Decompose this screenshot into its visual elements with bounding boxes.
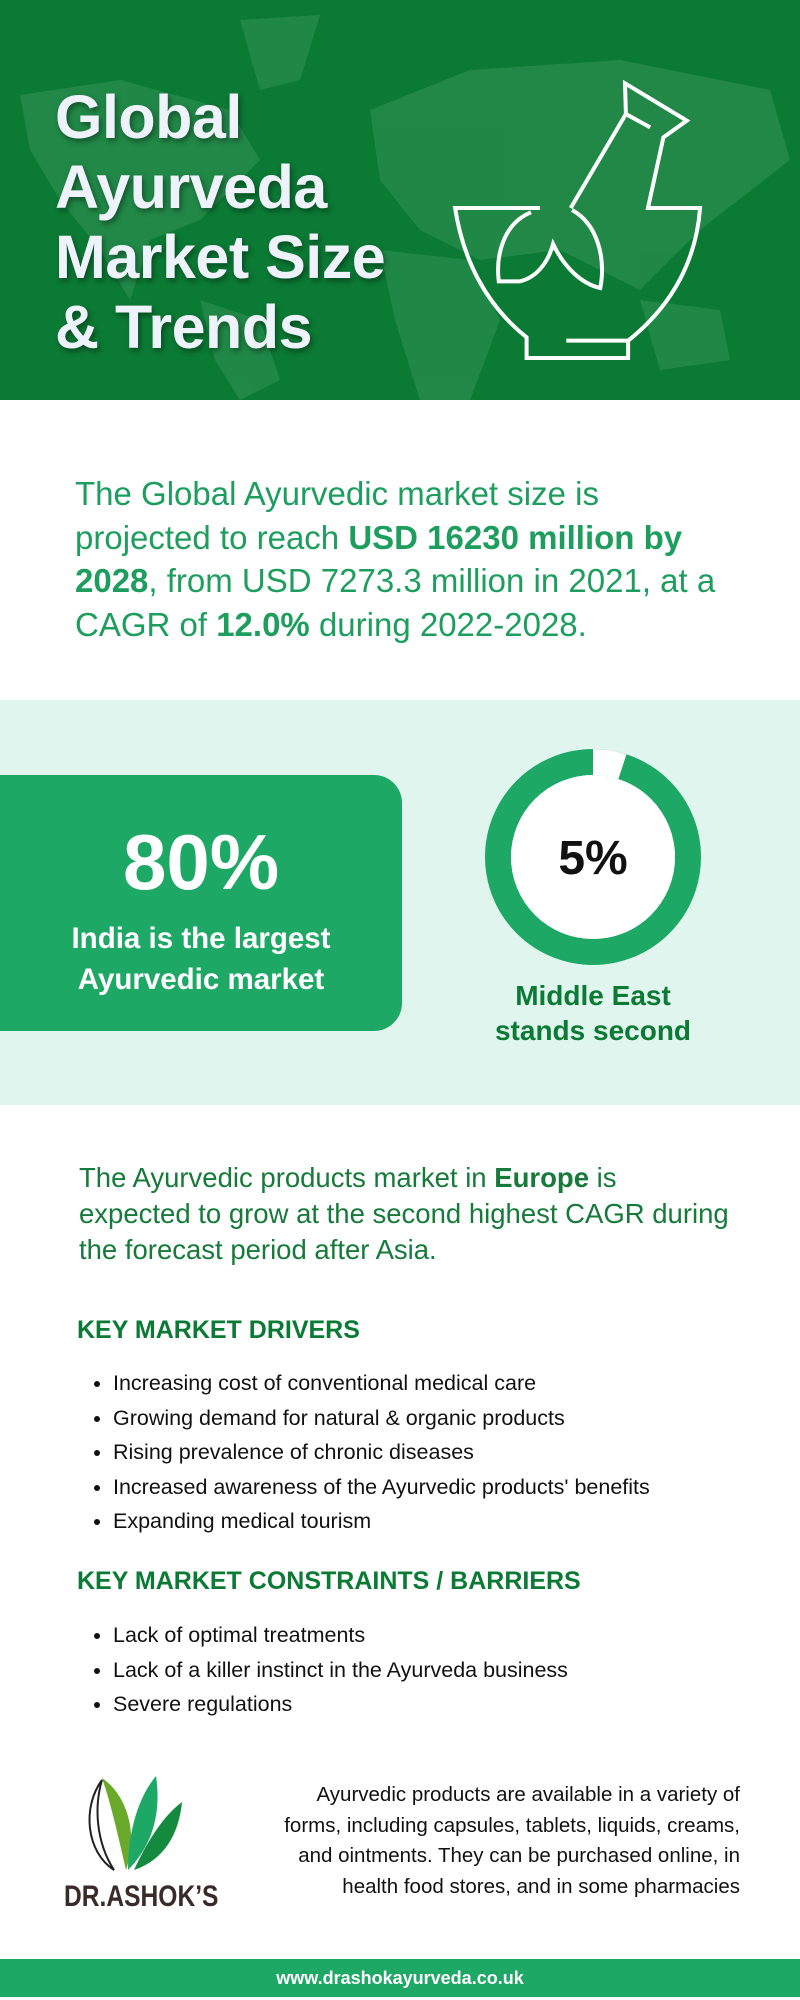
list: drivers: Increased awareness of the Ayurvedic products' benefits [113, 1474, 650, 1498]
availability text: health food stores, and in some pharmacies [342, 1874, 740, 1898]
footer [0, 1959, 800, 1997]
availability text [284, 1783, 740, 1898]
title: Ayurveda [55, 153, 327, 221]
India label: Ayurvedic market [78, 963, 324, 996]
intro text [75, 475, 716, 643]
header banner [0, 0, 800, 400]
logo: DR.ASHOK’S [64, 1880, 218, 1913]
title: Market Size [55, 223, 385, 291]
intro text: CAGR of 12.0% during 2022-2028. [75, 606, 587, 642]
donut chart: 5% [558, 832, 628, 885]
Europe text: expected to grow at the second highest CAGR during [79, 1198, 729, 1229]
list: drivers: Expanding medical tourism [113, 1509, 371, 1533]
panel: stats [0, 700, 800, 1105]
intro text: projected to reach USD 16230 million by [75, 518, 682, 556]
availability text: Ayurvedic products are available in a variety of [316, 1783, 740, 1806]
list: drivers [94, 1371, 650, 1533]
Europe text: The Ayurvedic products market in Europe is [79, 1162, 616, 1193]
Europe text: the forecast period after Asia. [79, 1234, 437, 1265]
Europe text [79, 1162, 729, 1265]
list: drivers: Rising prevalence of chronic diseases [113, 1440, 474, 1464]
list: drivers: Increasing cost of conventional medical care [113, 1371, 536, 1395]
list: constraints: Lack of optimal treatments [113, 1623, 365, 1647]
stat 80%: 80% [123, 818, 279, 906]
footer: www.drashokayurveda.co.uk [276, 1968, 524, 1988]
Middle East label: stands second [495, 1015, 691, 1046]
availability text: and ointments. They can be purchased online, in [298, 1844, 740, 1867]
panel: India stat [0, 775, 402, 1031]
list: constraints [94, 1623, 568, 1716]
availability text: forms, including capsules, tablets, liquids, creams, [284, 1814, 740, 1836]
donut chart [485, 749, 701, 965]
list: drivers: Growing demand for natural & organic products [113, 1406, 565, 1430]
Middle East label [495, 980, 691, 1046]
list: constraints: Lack of a killer instinct in the Ayurveda business [113, 1658, 568, 1682]
title: Global [55, 83, 242, 151]
intro text: The Global Ayurvedic market size is [75, 475, 599, 512]
Middle East label: Middle East [515, 980, 671, 1011]
intro text: 2028, from USD 7273.3 million in 2021, at a [75, 562, 715, 599]
title: & Trends [55, 293, 312, 361]
India label: India is the largest [71, 922, 331, 955]
list: constraints: Severe regulations [113, 1692, 292, 1716]
title [55, 83, 388, 361]
icon: mortar and pestle [452, 80, 702, 360]
heading: drivers: KEY MARKET DRIVERS [77, 1316, 360, 1344]
logo [64, 1776, 218, 1913]
India label [71, 922, 331, 996]
heading: constraints: KEY MARKET CONSTRAINTS / BARRIERS [77, 1567, 581, 1595]
